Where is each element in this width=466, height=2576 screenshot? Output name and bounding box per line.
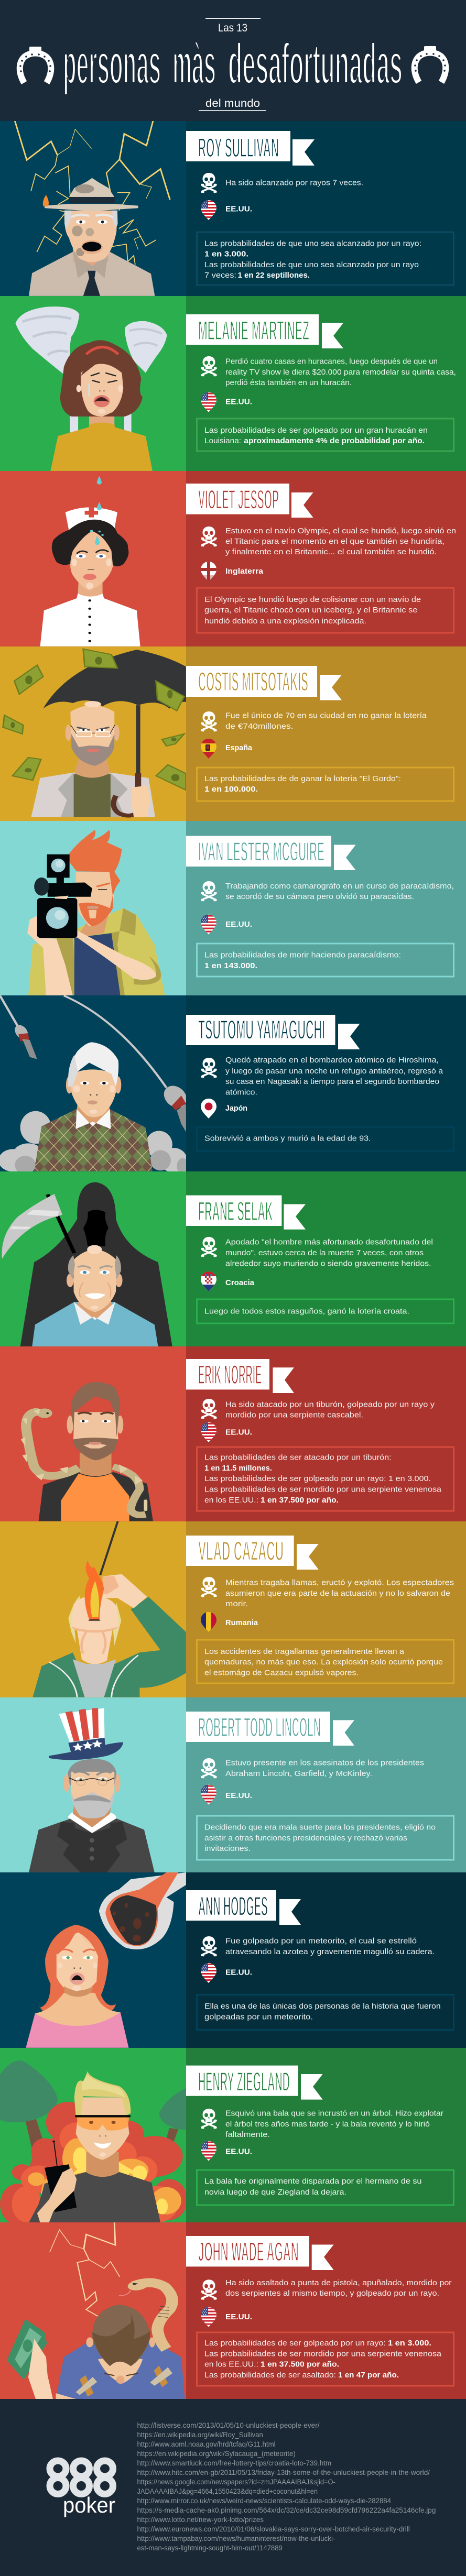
icon: Spain pin [201, 739, 216, 759]
odds box [197, 2332, 454, 2386]
icon: Croatia pin [201, 1271, 216, 1291]
panel: John Wade Agan [0, 2222, 466, 2399]
name banner: JOHN WADE AGAN [198, 2237, 299, 2267]
portrait: Erik Norrie with rattlesnake [0, 1346, 186, 1521]
fact text: Fue el único de 70 en su ciudad en no ganar la lotería [225, 711, 427, 720]
sources list: https://news.google.com/newspapers?id=zmJPAAAAIBAJ&sjid=O- [137, 2478, 335, 2486]
odds box: 7 veces: [204, 271, 236, 280]
title: personas [63, 31, 161, 96]
sources list: https://s-media-cache-ak0.pinimg.com/564x/dc/32/ce/dc32ce98d59cfd796222a4fa25146cfe.jpg [137, 2506, 436, 2514]
fact text: Fue golpeado por un meteorito, el cual se estrelló [225, 1937, 417, 1946]
icon: skull [201, 527, 217, 546]
odds box [197, 588, 454, 633]
fact text: faltalmente. [225, 2130, 270, 2139]
fact text: Perdió cuatro casas en huracanes, luego después de que un [225, 357, 438, 366]
name banner: HENRY ZIEGLAND [198, 2067, 290, 2098]
name banner [186, 1536, 319, 1570]
portrait: Roy Sullivan with lightning [0, 121, 186, 296]
odds box: 1 en 22 septillones. [238, 271, 310, 280]
fact text: mordido por una serpiente cascabel. [225, 1411, 363, 1420]
sources list: https://en.wikipedia.org/wiki/Sylacauga_(meteorite) [137, 2450, 296, 2458]
name banner [186, 131, 315, 166]
fact text: alrededor suyo muriendo o siendo gravemente heridos. [225, 1259, 431, 1268]
country: Croacia [225, 1278, 255, 1287]
subtitle: Las 13: Las 13 [218, 22, 247, 34]
sources list: http://www.hitc.com/en-gb/2011/05/13/friday-13th-some-of-the-unluckiest-people-in-the-world/ [137, 2469, 430, 2476]
name banner [186, 2066, 323, 2100]
odds box: hundió debido a una explosión inexplicada. [204, 617, 366, 626]
fact text [225, 1238, 433, 1268]
odds box: invitaciones. [204, 1844, 251, 1853]
odds box [197, 1299, 454, 1323]
sources list: https://en.wikipedia.org/wiki/Roy_Sullivan [137, 2431, 263, 2439]
subtitle: del mundo: del mundo [205, 97, 260, 109]
icon: skull [201, 1936, 217, 1956]
fact text [225, 357, 456, 387]
portrait: John Wade Agan with cobra and lightning [0, 2222, 186, 2399]
name banner [186, 2236, 334, 2270]
odds box: Las probabilidades de ser golpeado por un rayo: [204, 2339, 386, 2348]
name banner [186, 1890, 301, 1925]
country: EE.UU. [225, 2312, 252, 2321]
fact text [225, 527, 456, 556]
icon: skull [201, 1577, 217, 1597]
odds box: guerra, el Titanic chocó con un iceberg, y el Britannic se [204, 606, 417, 615]
panel: Melanie Martinez [0, 296, 466, 471]
panel: footer [0, 2399, 466, 2576]
fact text: perdió ésta también en un huracán. [225, 378, 352, 387]
fact text: atómico. [225, 1088, 257, 1097]
fact text [225, 882, 454, 901]
fact text: mundo", estuvo cerca de la muerte 7 veces, con otros [225, 1248, 424, 1257]
sources list: http://www.aoml.noaa.gov/hrd/tcfaq/G11.html [137, 2440, 276, 2448]
icon: Japan pin [201, 1099, 216, 1119]
name banner [186, 1196, 306, 1230]
panel: Roy Sullivan [0, 121, 466, 296]
odds box: Las probabilidades de ser mordido por una serpiente venenosa [204, 2349, 442, 2358]
country: EE.UU. [225, 1968, 252, 1977]
icon: USA pin [201, 1422, 216, 1442]
fact text: Abraham Lincoln, Garfield, y McKinley. [225, 1769, 372, 1778]
panel: Henry Ziegland [0, 2048, 466, 2224]
fact text: de €740millones. [225, 722, 294, 731]
name banner: VLAD CAZACU [198, 1536, 284, 1566]
odds box: Las probabilidades de ser mordido por una serpiente venenosa [204, 1485, 442, 1494]
portrait: Vlad Cazacu fire eater [0, 1521, 186, 1697]
country: EE.UU. [225, 1791, 252, 1800]
fact text: reality TV show le diera $20.000 para remodelar su quinta casa, [225, 368, 456, 377]
portrait: Costis Mitsotakis under umbrella with money [0, 646, 186, 821]
name banner: ROY SULLIVAN [198, 133, 279, 163]
panel: Ann Hodges [0, 1872, 466, 2048]
fact text [225, 1578, 454, 1608]
sources list: http://www.smartluck.com/free-lottery-tips/croatia-loto-739.htm [137, 2459, 331, 2467]
fact text: y finalmente en el Britannic... el cual también se hundió. [225, 547, 437, 556]
odds box: asistir a otras funciones presidenciales y rechazó varias [204, 1834, 407, 1843]
name banner: VIOLET JESSOP [198, 484, 279, 516]
panel: Vlad Cazacu [0, 1521, 466, 1697]
panel: Erik Norrie [0, 1346, 466, 1521]
icon: right horseshoe [414, 46, 446, 82]
odds box: Las probabilidades de ser asaltado: [204, 2371, 336, 2380]
odds box [197, 419, 454, 451]
icon: skull [201, 1237, 217, 1257]
country: EE.UU. [225, 398, 252, 407]
odds box: en los EE.UU.: [204, 1496, 258, 1505]
odds box [197, 1995, 454, 2030]
odds box: el estomágo de Cazacu expulsó vapores. [204, 1668, 359, 1678]
name banner [186, 666, 342, 700]
icon: skull [201, 173, 217, 193]
sources list: http://www.lotto.net/new-york-lotto/prizes [137, 2516, 264, 2524]
sources list [137, 2421, 436, 2552]
title: màs [172, 31, 216, 96]
icon: skull [201, 1058, 217, 1078]
country: Inglaterra [225, 567, 264, 576]
name banner: ANN HODGES [198, 1891, 268, 1922]
sources list: est-man-says-lightning-sought-him-out/1147889 [137, 2544, 283, 2552]
country: España [225, 743, 253, 752]
icon: skull [201, 1399, 217, 1419]
odds box: Las probabilidades de ser atacado por un tiburón: [204, 1453, 392, 1462]
country: EE.UU. [225, 204, 252, 214]
fact text: atravesando la azotea y gravemente magulló su cadera. [225, 1947, 435, 1956]
name banner [186, 314, 343, 348]
fact text: el árbol tres años mas tarde - y la bala reventó y lo hirió [225, 2120, 430, 2129]
panel: Ivan Lester McGuire [0, 821, 466, 995]
icon: skull [201, 2109, 217, 2129]
odds box: Las probabilidades de que uno sea alcanzado por un rayo: [204, 239, 421, 248]
odds box: 1 en 37.500 por año. [261, 2360, 339, 2369]
fact text: Estuvo presente en los asesinatos de los presidentes [225, 1759, 424, 1768]
panel: Costis Mitsotakis [0, 646, 466, 821]
fact text: Ha sido asaltado a punta de pistola, apuñalado, mordido por [225, 2278, 452, 2287]
odds box: en los EE.UU.: [204, 2360, 258, 2369]
sources list: http://www.tampabay.com/news/humaninterest/now-the-unlucki- [137, 2535, 335, 2542]
icon: skull [201, 1758, 217, 1778]
odds box: Luego de todos estos rasguños, ganó la lotería croata. [204, 1307, 409, 1316]
odds box: Las probabilidades de ser golpeado por un gran huracán en [204, 426, 428, 435]
panel: Tsutomu Yamaguchi [0, 995, 466, 1174]
odds box: Las probabilidades de morir haciendo paracaídismo: [204, 951, 401, 960]
fact text: dos serpientes al mismo tiempo, y golpeado por un rayo. [225, 2289, 439, 2298]
odds box: Ella es una de las únicas dos personas de la historia que fueron [204, 2002, 441, 2011]
odds box: 1 en 100.000. [204, 785, 258, 794]
fact text: Apodado "el hombre más afortunado desafortunado del [225, 1238, 433, 1247]
fact text [225, 1937, 435, 1956]
name banner: FRANE SELAK [198, 1196, 273, 1227]
panel: Violet Jessop [0, 471, 466, 646]
name banner [186, 1359, 294, 1393]
fact text [225, 1056, 443, 1097]
odds box: Sobrevivió a ambos y murió a la edad de 93. [204, 1134, 371, 1143]
portrait: Melanie Martinez with tornadoes [0, 296, 186, 471]
sources list: http://www.mirror.co.uk/news/weird-news/scientists-calculate-odd-ways-die-282884 [137, 2497, 391, 2505]
country: EE.UU. [225, 2147, 252, 2156]
fact text [225, 2109, 443, 2139]
icon: USA pin [201, 915, 216, 935]
odds box [197, 232, 454, 285]
odds box: Decidiendo que era mala suerte para los presidentes, eligió no [204, 1823, 436, 1832]
panel: Robert Todd Lincoln [0, 1697, 466, 1872]
icon: USA pin [201, 2141, 216, 2161]
icon: USA pin [201, 392, 216, 412]
odds box: Las probabilidades de que uno sea alcanzado por un rayo [204, 260, 419, 269]
fact text: Quedó atrapado en el bombardeo atómico de Hiroshima, [225, 1056, 439, 1065]
name banner: ERIK NORRIE [198, 1360, 262, 1390]
fact text [225, 1759, 424, 1778]
fact text: Ha sido alcanzado por rayos 7 veces. [225, 179, 363, 188]
icon: USA pin [201, 1785, 216, 1805]
odds box: Louisiana: [204, 436, 241, 445]
portrait: Ivan Lester McGuire with camera [0, 821, 186, 995]
name banner [186, 1015, 360, 1049]
sources list: http://www.euronews.com/2010/01/06/slovakia-says-sorry-over-botched-air-security-drill [137, 2525, 410, 2533]
odds box [197, 1816, 454, 1860]
odds box [197, 1127, 454, 1151]
country: EE.UU. [225, 1428, 252, 1437]
fact text: se acordó de su cámara pero olvidó su paracaídas. [225, 892, 414, 901]
name banner [186, 1712, 354, 1746]
portrait: Henry Ziegland with explosion [0, 2048, 187, 2224]
icon: skull [201, 356, 217, 376]
icon: USA pin [201, 2307, 216, 2327]
fact text: Mientras tragaba llamas, eructó y explotó. Los espectadores [225, 1578, 454, 1587]
odds box [197, 2170, 454, 2205]
odds box: Las probabilidades de ser golpeado por un rayo: 1 en 3.000. [204, 1474, 431, 1483]
odds box: 1 en 143.000. [204, 961, 257, 970]
logo: 888 poker [50, 2461, 115, 2517]
panel: page header [0, 0, 466, 121]
odds box: golpeadas por un meteorito. [204, 2013, 313, 2022]
odds box: novia luego de que Ziegland la dejara. [204, 2188, 346, 2197]
odds box [197, 944, 454, 977]
odds box: 1 en 3.000. [204, 250, 248, 259]
fact text: Ha sido atacado por un tiburón, golpeado por un rayo y [225, 1400, 435, 1409]
odds box: 1 en 3.000. [388, 2339, 431, 2348]
sources list: http://listverse.com/2013/01/05/10-unluckiest-people-ever/ [137, 2421, 320, 2429]
fact text: morir. [225, 1599, 248, 1608]
odds box: 1 en 47 por año. [338, 2371, 399, 2380]
fact text: Estuvo en el navío Olympic, el cual se hundió, luego sirvió en [225, 527, 456, 535]
country: Rumania [225, 1618, 258, 1627]
name banner [186, 484, 313, 518]
portrait: Robert Todd Lincoln in stars and stripes hat [0, 1697, 186, 1872]
fact text: y luego de pasar una noche un refugio antiaéreo, regresó a [225, 1067, 443, 1076]
odds box [197, 768, 454, 801]
odds box [197, 1640, 454, 1683]
odds box: 1 en 11.5 millones. [204, 1464, 272, 1473]
panel: Frane Selak [0, 1171, 466, 1346]
logo: 888 poker: poker [63, 2493, 115, 2517]
portrait: Violet Jessop nurse [0, 471, 186, 646]
odds box: Las probabilidades de de ganar la lotería "El Gordo": [204, 774, 401, 783]
portrait: Tsutomu Yamaguchi with bombs [0, 995, 191, 1174]
odds box [197, 1447, 454, 1511]
odds box: aproximadamente 4% de probabilidad por año. [244, 436, 425, 445]
fact text [225, 1400, 435, 1420]
odds box: quemaduras, no más que eso. La explosión solo ocurrió porque [204, 1658, 443, 1667]
icon: skull [201, 881, 217, 901]
country: Japón [225, 1104, 247, 1113]
icon: skull [201, 2279, 217, 2300]
sources list: JADAAAAIBAJ&pg=4664,1550423&dq=died+coconut&hl=en [137, 2487, 318, 2495]
fact text [225, 2278, 452, 2298]
fact text [225, 711, 427, 731]
icon: USA pin [201, 1963, 216, 1983]
fact text: Trabajando como camarográfo en un curso de paracaídismo, [225, 882, 454, 891]
icon: England pin [201, 562, 216, 582]
name banner [186, 836, 356, 870]
icon: skull [201, 711, 217, 731]
odds box: Los accidentes de tragallamas generalmente llevan a [204, 1647, 405, 1656]
fact text: el Titanic para el momento en el que también se hundiría, [225, 537, 445, 546]
odds box: El Olympic se hundió luego de colisionar con un navío de [204, 595, 421, 604]
fact text: su casa en Nagasaki a tiempo para el segundo bombardeo [225, 1077, 439, 1086]
odds box: 1 en 37.500 por año. [261, 1496, 339, 1505]
country: EE.UU. [225, 920, 252, 929]
icon: Romania pin [201, 1612, 216, 1632]
odds box: La bala fue originalmente disparada por el hermano de su [204, 2177, 421, 2186]
fact text: Esquivó una bala que se incrustó en un árbol. Hizo explotar [225, 2109, 443, 2118]
icon: USA pin [201, 200, 216, 220]
portrait: Frane Selak with grim reaper [0, 1171, 186, 1346]
fact text: asumieron que era parte de la actuación y no lo salvaron de [225, 1589, 450, 1598]
icon: left horseshoe [19, 47, 51, 83]
portrait: Ann Hodges with meteorite [0, 1872, 186, 2048]
